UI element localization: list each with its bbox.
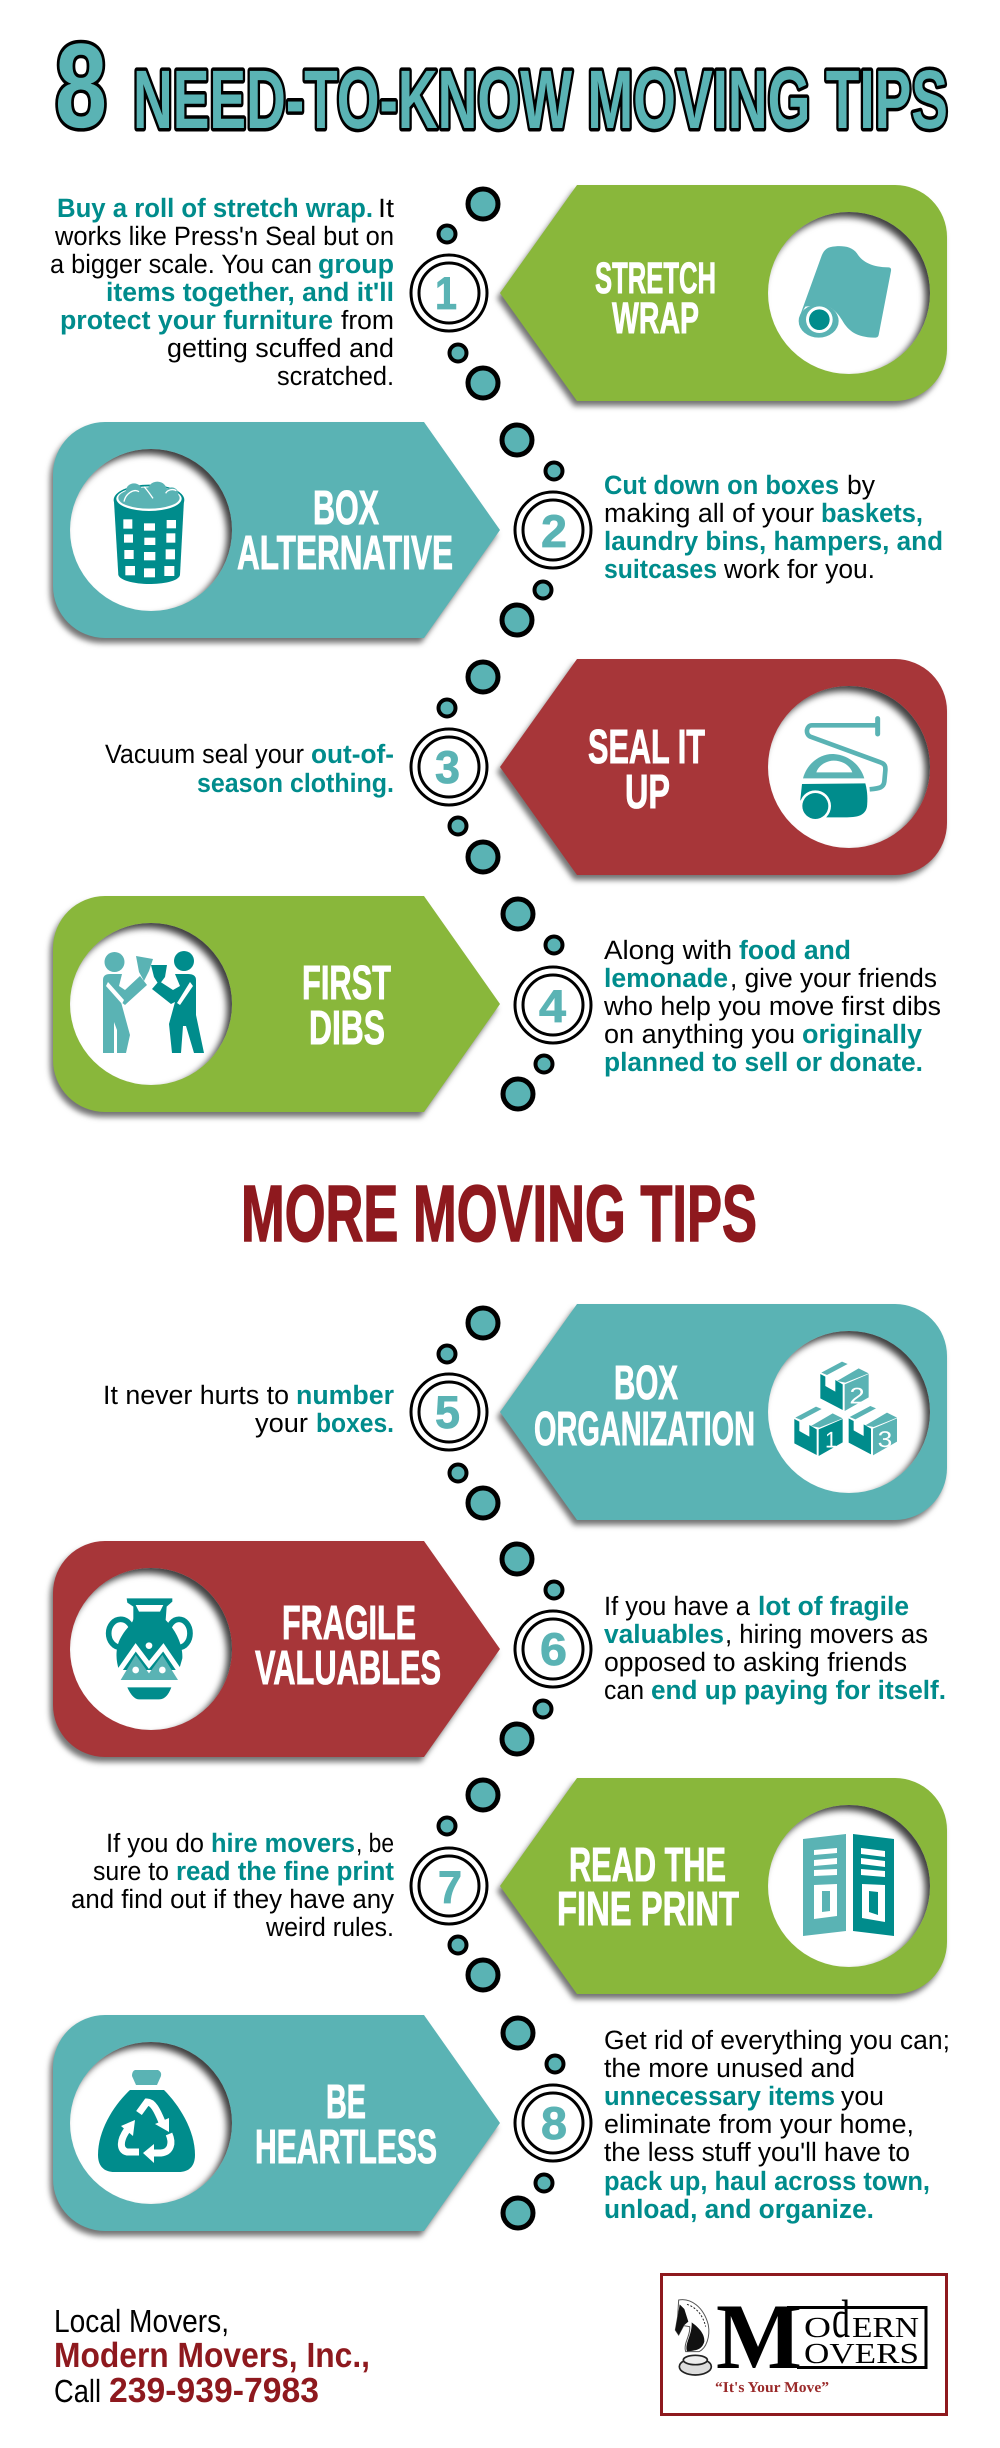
logo: modern movers: O [804,2312,831,2344]
title [55,19,948,153]
text block: tip 2: baskets, [821,498,923,528]
icon: open document [803,1834,894,1936]
number badge 2 with dots [502,425,591,635]
panel: first dibs: DIBS [309,1002,385,1055]
panel: box organization: BOX [614,1357,678,1410]
panel: stretch wrap: STRETCH [595,254,716,303]
number badge 6 with dots: 6 [540,1623,567,1675]
text block: tip 8: unload, and organize. [604,2194,874,2224]
text block: tip 7: hire movers [211,1828,355,1858]
text block: tip 6: opposed to asking friends [604,1647,907,1677]
text block: tip 2: suitcases [604,554,717,584]
text block: tip 8: eliminate from your home, [604,2109,914,2139]
number badge 4 with dots: 4 [539,980,566,1032]
text block: tip 1: works like Press'n Seal but on [54,221,394,251]
panel: read the fine print [500,1778,947,1994]
text block: tip 3 [105,739,394,798]
panel: fragile valuables: FRAGILE [282,1597,416,1650]
text block: tip 4: lemonade [604,963,728,993]
icon: numbered boxes: 2 [849,1383,865,1408]
number badge 5 with dots: 5 [435,1386,460,1438]
text block: tip 8: you [841,2081,884,2111]
text block: tip 3: Vacuum seal your [105,739,304,769]
text block: tip 4: originally [802,1019,922,1049]
text block: tip 7: sure to [93,1856,169,1886]
footer contact text: Modern Movers, Inc., [54,2336,370,2375]
logo: modern movers [662,2274,946,2414]
number badge 7 with dots: 7 [438,1861,462,1913]
text block: tip 5: It never hurts to [103,1380,289,1410]
number badge 5 with dots [411,1308,498,1518]
text block: tip 4 [603,935,941,1077]
number badge 7 with dots [411,1780,498,1990]
text block: tip 2: Cut down on boxes [604,470,839,500]
panel: box organization [500,1304,947,1520]
panel: read the fine print: READ THE [569,1839,726,1892]
panel: read the fine print: FINE PRINT [557,1883,739,1936]
text block: tip 5 [103,1380,394,1438]
icon: laundry basket [114,482,184,584]
panel: be heartless [53,2015,500,2231]
text block: tip 1: protect your furniture [60,305,333,335]
text block: tip 4: food and [739,935,851,965]
text block: tip 2: making all of your [604,498,814,528]
text block: tip 5: number [296,1380,394,1410]
text block: tip 4: Along with [604,935,732,965]
text block: tip 7 [71,1828,395,1942]
text block: tip 8: unnecessary items [604,2081,835,2111]
text block: tip 5: your [255,1408,308,1438]
text block: tip 4: who help you move first dibs [603,991,941,1021]
number badge 4 with dots [503,899,591,1109]
panel: seal it up: UP [625,766,670,819]
text block: tip 1: from [341,305,394,335]
text block: tip 2 [604,470,943,584]
number badge 6 with dots [502,1544,591,1754]
text block: tip 1 [50,193,395,391]
icon: roll of wrap [799,246,891,338]
text block: tip 1: Buy a roll of stretch wrap. [57,193,373,223]
footer contact text: 239-939-7983 [109,2371,319,2410]
text block: tip 7: weird rules. [265,1912,394,1942]
text block: tip 7: and find out if they have any [71,1884,395,1914]
text block: tip 1: a bigger scale. You can [50,249,312,279]
text block: tip 6 [604,1591,946,1705]
panel: seal it up [500,659,947,875]
panel: be heartless: HEARTLESS [255,2121,437,2174]
number badge 2 with dots: 2 [541,505,567,557]
number badge 8 with dots [503,2018,591,2228]
text block: tip 7: read the fine print [176,1856,394,1886]
icon: recycling bag [98,2070,195,2172]
panel: box alternative: BOX [313,482,379,535]
text block: tip 5: boxes. [316,1408,394,1438]
text block: tip 1: scratched. [277,361,394,391]
text block: tip 6: end up paying for itself. [651,1675,946,1705]
text block: tip 6: lot of fragile [758,1591,909,1621]
number badge 1 with dots: 1 [435,267,457,319]
number badge 8 with dots: 8 [541,2097,567,2149]
text block: tip 2: work for you. [723,554,875,584]
panel: stretch wrap [500,185,947,401]
panel: be heartless: BE [326,2076,366,2129]
text block: tip 4: on anything you [604,1019,795,1049]
icon: vase [109,1598,190,1699]
text block: tip 8: pack up, haul across town, [604,2166,930,2196]
number badge 1 with dots [411,189,498,398]
number badge 3 with dots: 3 [435,741,460,793]
icon: chess knight [675,2300,711,2375]
title: 8 [55,19,107,153]
text block: tip 3: season clothing. [197,768,394,798]
panel: box alternative: ALTERNATIVE [237,527,453,580]
text block: tip 7: , be [356,1828,394,1858]
footer contact text: Call [54,2373,101,2409]
icon: numbered boxes [794,1362,897,1456]
panel: box alternative [53,422,500,638]
text block: tip 8: the more unused and [604,2053,855,2083]
footer contact text [54,2303,370,2410]
panel: first dibs [53,896,500,1112]
logo: modern movers: “It's Your Move” [715,2380,829,2396]
text block: tip 2: laundry bins, hampers, and [604,526,943,556]
text block: tip 4: planned to sell or donate. [604,1047,923,1077]
text block: tip 4: , give your friends [730,963,937,993]
text block: tip 6: valuables [604,1619,724,1649]
text block: tip 3: out-of- [311,739,394,769]
panel: fragile valuables: VALUABLES [255,1642,441,1695]
panel: fragile valuables [53,1541,500,1757]
icon: two friends toasting [103,951,204,1053]
text block: tip 6: , hiring movers as [725,1619,928,1649]
text block: tip 6: can [604,1675,644,1705]
logo: modern movers: OVERS [804,2338,919,2370]
icon: numbered boxes: 3 [878,1427,892,1452]
panel: stretch wrap: WRAP [612,294,699,343]
logo: modern movers: ERN [852,2312,919,2344]
text block: tip 8: the less stuff you'll have to [604,2137,910,2167]
logo: modern movers: M [716,2285,802,2389]
panel: box organization: ORGANIZATION [534,1403,755,1456]
icon: vacuum cleaner [800,719,885,822]
text block: tip 6: If you have a [604,1591,750,1621]
number badge 3 with dots [411,662,498,872]
panel: seal it up: SEAL IT [588,721,705,774]
text block: tip 8: Get rid of everything you can; [604,2025,950,2055]
text block: tip 1: It [378,193,395,223]
panel: first dibs: FIRST [302,957,391,1010]
text block: tip 1: getting scuffed and [167,333,394,363]
logo: modern movers: d [832,2289,850,2349]
text block: tip 1: items together, and it'll [106,277,394,307]
footer contact text: Local Movers, [54,2303,229,2339]
text block: tip 1: group [318,249,394,279]
text block: tip 2: by [847,470,876,500]
text block: tip 7: If you do [106,1828,204,1858]
icon: numbered boxes: 1 [825,1427,837,1452]
text block: tip 8 [604,2025,950,2224]
